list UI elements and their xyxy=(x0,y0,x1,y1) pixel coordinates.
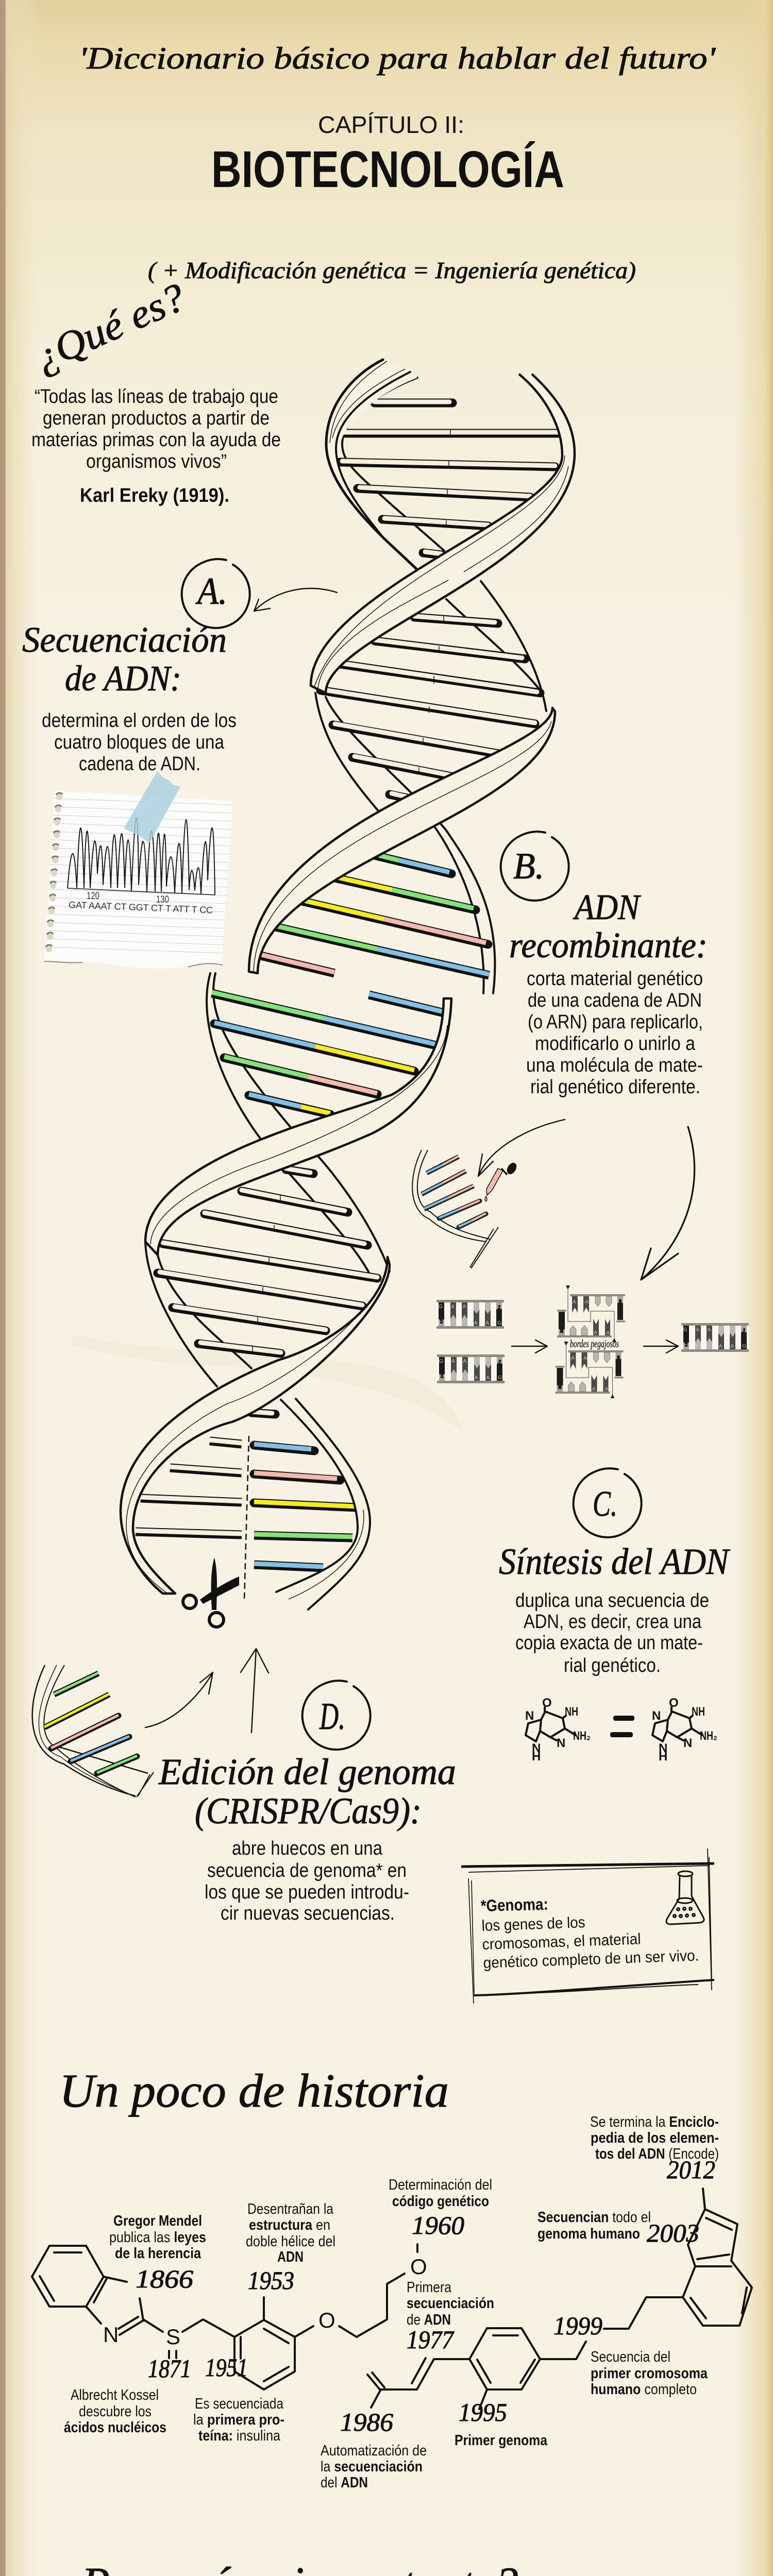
text block: edición: secuencia de genoma* en xyxy=(207,1860,407,1882)
chart: chromatogram note on paper xyxy=(44,771,233,969)
milestone labels: Gregor Mendel xyxy=(113,2213,202,2229)
heading: ADN recombinante: recombinante: xyxy=(509,926,708,965)
milestone labels: estructura en xyxy=(249,2217,330,2233)
text block: definition quote: “Todas las líneas de trabajo que xyxy=(35,386,278,408)
heading: ADN recombinante: ADN xyxy=(573,888,641,927)
text block: síntesis: rial genético. xyxy=(564,1655,661,1676)
icon: circled C: C. xyxy=(593,1484,617,1524)
note text: cromosomas, el material xyxy=(482,1930,641,1953)
milestone labels: humano completo xyxy=(591,2381,697,2398)
atom labels xyxy=(103,2255,427,2349)
diagram: DNA block 1 xyxy=(436,1300,504,1329)
heading: un poco de historia: Un poco de historia xyxy=(59,2064,449,2117)
milestone labels: descubre los xyxy=(79,2403,152,2420)
milestone labels: Albrecht Kossel xyxy=(71,2387,159,2403)
base pairs: lower section xyxy=(158,1168,377,1414)
milestone labels: de la herencia xyxy=(115,2245,201,2262)
years: 1995 xyxy=(459,2398,507,2427)
text block: ADN recombinante: modificarlo o unirlo a xyxy=(535,1033,696,1055)
icon: circled A: A. xyxy=(195,570,227,613)
text block: edición: abre huecos en una xyxy=(232,1838,383,1859)
text block: edición xyxy=(205,1838,409,1924)
diagram: guanine molecule left: NH₂ xyxy=(573,1729,591,1743)
diagram: guanine molecule right: O xyxy=(669,1696,679,1710)
arrow: fragment up to helix xyxy=(145,1672,213,1727)
diagram: sticky-end fragment lower: A A xyxy=(571,1355,587,1361)
title: series name: 'Diccionario básico para hablar del futuro' xyxy=(79,41,716,75)
years: 1953 xyxy=(248,2266,294,2295)
diagram: sticky-end fragment upper: A A xyxy=(573,1299,589,1305)
diagram: DNA block 1: G A A T T C xyxy=(439,1304,501,1310)
milestone labels: ácidos nucléicos xyxy=(64,2419,166,2436)
subtitle: ( + Modificación genética = Ingeniería genética) xyxy=(148,257,636,283)
diagram: guanine molecule left: N xyxy=(525,1709,534,1723)
note text: los genes de los xyxy=(481,1914,585,1935)
diagram: guanine molecule right: N xyxy=(659,1741,667,1755)
text block: definition quote: organismos vivos” xyxy=(86,451,227,472)
milestone labels xyxy=(64,2114,719,2491)
icon: circled D xyxy=(303,1681,371,1750)
diagram: DNA block 2: G A A T T C xyxy=(439,1359,502,1364)
text block: secuenciación xyxy=(42,710,237,775)
illustration: DNA fragment with dropper xyxy=(412,1150,518,1268)
text block: edición: los que se pueden introdu- xyxy=(205,1882,409,1903)
years: 1866 xyxy=(136,2264,193,2293)
diagram: DNA block 2 xyxy=(437,1354,505,1383)
diagram: DNA block 1: C T T A A G xyxy=(439,1320,501,1326)
milestone labels: Secuencian todo el xyxy=(537,2209,651,2226)
base pairs: coloured recombinant section xyxy=(212,854,489,1114)
text block: ADN recombinante: (o ARN) para replicarlo, xyxy=(528,1011,703,1033)
milestone labels: la secuenciación xyxy=(321,2459,423,2475)
heading: edición del genoma xyxy=(158,1751,456,1832)
atom labels: N xyxy=(103,2323,119,2347)
diagram: guanine molecule right: N xyxy=(652,1709,661,1723)
milestone labels: de ADN xyxy=(407,2312,451,2328)
milestone labels: Automatización de xyxy=(321,2443,427,2459)
milestone labels: Desentrañan la xyxy=(247,2201,334,2217)
years: 1999 xyxy=(553,2311,602,2340)
text block: ADN recombinante: de una cadena de ADN xyxy=(528,990,702,1011)
front ribbons of the helix xyxy=(121,360,575,1609)
diagram: guanine molecule left: H xyxy=(532,1750,541,1764)
base pairs: section being cut xyxy=(136,1440,356,1568)
diagram: guanine molecule right: H xyxy=(659,1750,667,1764)
heading: ADN recombinante xyxy=(509,888,708,965)
milestone labels: Es secuenciada xyxy=(195,2396,284,2412)
molecule bonds xyxy=(32,2189,752,2409)
icon: circled C xyxy=(574,1468,642,1537)
diagram: DNA block 2: C T T A A G xyxy=(439,1375,502,1381)
text block: síntesis: copia exacta de un mate- xyxy=(515,1632,703,1654)
illustration: DNA double helix xyxy=(121,360,575,1627)
milestone labels: ADN xyxy=(277,2249,304,2265)
diagram: sticky-end fragment upper: A A xyxy=(594,1330,610,1336)
arrow: sticky ends to result xyxy=(644,1340,678,1353)
label: bordes pegajosos: bordes pegajosos xyxy=(570,1337,619,1350)
diagram: guanine molecule right xyxy=(652,1696,717,1764)
text block: definition quote: generan productos a partir de xyxy=(43,408,270,429)
diagram: guanine molecule left: N xyxy=(557,1736,565,1750)
icon: flask xyxy=(666,1871,704,1924)
arrow: section D up to scissors xyxy=(241,1649,268,1733)
note text: *Genoma: xyxy=(480,1895,548,1915)
icon: circled B: B. xyxy=(513,845,544,887)
atom labels: O xyxy=(318,2308,335,2332)
text block: ADN recombinante: rial genético diferente. xyxy=(530,1076,700,1098)
text block: definition quote: materias primas con la ayuda de xyxy=(31,429,281,451)
diagram: recombined DNA block: C T T A A G xyxy=(683,1344,746,1349)
text block: síntesis: ADN, es decir, crea una xyxy=(524,1611,702,1633)
heading: chapter: CAPÍTULO II: xyxy=(318,111,464,138)
years: 1960 xyxy=(412,2211,464,2240)
text block: secuenciación: cuatro bloques de una xyxy=(54,732,225,753)
milestone labels: Primera xyxy=(407,2279,452,2296)
heading: secuenciación de ADN: de ADN: xyxy=(65,659,181,699)
years: 1977 xyxy=(407,2325,455,2354)
diagram: guanine molecule right: N xyxy=(683,1736,692,1750)
years xyxy=(136,2155,715,2436)
text block: secuenciación: cadena de ADN. xyxy=(79,753,200,775)
diagram: guanine molecule right: NH xyxy=(692,1705,705,1719)
equals sign xyxy=(610,1716,634,1737)
milestone labels: tos del ADN (Encode) xyxy=(595,2146,719,2162)
text block: ADN recombinante: una molécula de mate- xyxy=(526,1055,703,1076)
panel: genome note xyxy=(461,1849,714,2004)
years: 1951 xyxy=(205,2353,248,2382)
icon: circled D: D. xyxy=(319,1696,345,1738)
heading: edición del genoma: Edición del genoma xyxy=(158,1751,456,1792)
icon: circled B xyxy=(501,832,569,901)
chart: chromatogram note on paper: 130 xyxy=(156,894,169,905)
diagram: sticky-end fragment lower xyxy=(556,1342,624,1398)
diagram: guanine molecule left xyxy=(525,1696,591,1764)
heading: secuenciación de ADN xyxy=(22,620,227,699)
milestone labels: la primera pro- xyxy=(193,2412,284,2428)
chart: chromatogram note on paper: 120 xyxy=(87,891,99,902)
text block: definition quote: Karl Ereky (1919). xyxy=(80,485,229,506)
years: 2012 xyxy=(667,2155,715,2184)
milestone labels: Secuencia del xyxy=(591,2349,670,2365)
chart: timeline drawn as a molecule xyxy=(32,2114,752,2491)
years: 1986 xyxy=(340,2408,393,2436)
milestone labels: teína: insulina xyxy=(198,2428,281,2444)
diagram: guanine molecule left: N xyxy=(532,1741,541,1755)
atom labels: S xyxy=(166,2325,180,2349)
milestone labels: Se termina la Enciclo- xyxy=(590,2114,719,2130)
diagram: guanine molecule left: O xyxy=(542,1696,552,1710)
diagram: sticky-end fragment lower: A A xyxy=(592,1386,608,1392)
note text xyxy=(480,1895,699,1972)
heading: qué es: ¿Qué es? xyxy=(28,274,192,380)
milestone labels: Determinación del xyxy=(389,2177,492,2193)
illustration: DNA fragment for genome editing xyxy=(32,1665,154,1797)
diagram: sticky-end fragment upper xyxy=(557,1285,625,1342)
milestone labels: genoma humano xyxy=(537,2226,640,2242)
diagram: recombined DNA block: G A A T T C xyxy=(683,1327,746,1333)
text block: síntesis xyxy=(515,1590,709,1676)
note text: genético completo de un ser vivo. xyxy=(483,1947,699,1972)
milestone labels: pedia de los elemen- xyxy=(591,2130,719,2146)
chart: chromatogram note on paper: GAT AAAT CT GGT CT T ATT T CC xyxy=(69,900,213,916)
base pairs: upper section xyxy=(321,402,560,800)
heading: edición del genoma: (CRISPR/Cas9): xyxy=(195,1790,422,1832)
text block: secuenciación: determina el orden de los xyxy=(42,710,237,732)
back strands xyxy=(145,378,546,1386)
milestone labels: primer cromosoma xyxy=(591,2365,708,2382)
cut line xyxy=(244,1436,249,1600)
text block: definition quote xyxy=(31,386,281,506)
milestone labels: publica las leyes xyxy=(109,2229,206,2246)
arrow: helix to section A xyxy=(254,588,337,611)
atom labels: O xyxy=(410,2255,427,2279)
years: 1871 xyxy=(148,2354,191,2383)
milestone labels: Primer genoma xyxy=(455,2432,548,2449)
arrow: to DNA fragment xyxy=(478,1120,565,1176)
text block: ADN recombinante: corta material genético xyxy=(527,968,703,990)
diagram: guanine molecule right: NH₂ xyxy=(700,1729,717,1743)
diagram: recombined DNA block xyxy=(681,1323,749,1352)
milestone labels: doble hélice del xyxy=(246,2233,335,2250)
text block: edición: cir nuevas secuencias. xyxy=(221,1903,395,1924)
heading: secuenciación de ADN: Secuenciación xyxy=(22,620,227,660)
diagram: guanine molecule left: NH xyxy=(565,1705,578,1719)
heading: biotecnología: BIOTECNOLOGÍA xyxy=(211,141,564,198)
text block: ADN recombinante xyxy=(526,968,703,1098)
milestone labels: secuenciación xyxy=(407,2295,494,2312)
icon: circled A xyxy=(182,559,250,628)
text block: síntesis: duplica una secuencia de xyxy=(515,1590,709,1612)
milestone labels: código genético xyxy=(392,2193,489,2210)
icon: scissors xyxy=(183,1557,239,1627)
milestone labels: del ADN xyxy=(321,2475,368,2491)
years: 2003 xyxy=(647,2218,699,2247)
arrow: blocks to sticky ends xyxy=(512,1340,547,1353)
arrow: to recombinant blocks xyxy=(641,1127,695,1280)
heading: síntesis del ADN: Síntesis del ADN xyxy=(499,1541,731,1582)
